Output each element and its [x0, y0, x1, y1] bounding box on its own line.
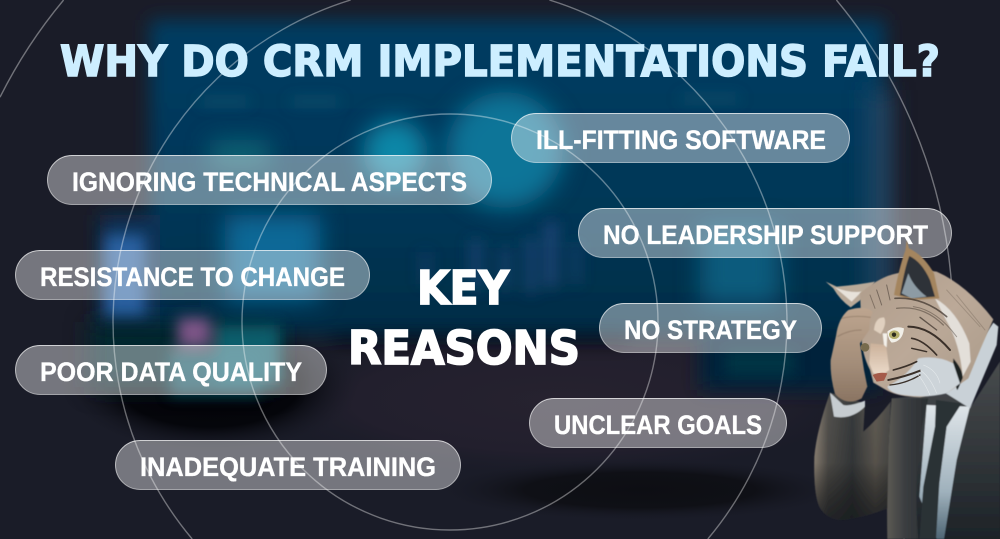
tie	[919, 400, 962, 539]
pill: ill-fitting software	[512, 114, 850, 162]
pill: ignoring technical aspects: IGNORING TECHNICAL ASPECTS	[72, 167, 467, 197]
pill: poor data quality: POOR DATA QUALITY	[40, 357, 302, 387]
fur stripes	[870, 285, 985, 385]
pill: no leadership support	[578, 208, 952, 258]
pill: no strategy: NO STRATEGY	[624, 315, 797, 345]
pill: no leadership support: NO LEADERSHIP SUPPORT	[603, 220, 928, 250]
raised sleeve	[814, 393, 891, 520]
ear right	[894, 240, 939, 300]
pill: unclear goals: UNCLEAR GOALS	[554, 410, 762, 440]
pill: inadequate training	[116, 440, 460, 490]
brow tufts	[874, 317, 885, 334]
pill: resistance to change: RESISTANCE TO CHANGE	[40, 262, 345, 292]
illustration: lynx in a suit, hand on forehead	[814, 240, 1000, 539]
pill: ignoring technical aspects	[48, 156, 492, 204]
pill: resistance to change	[16, 250, 370, 300]
nose	[873, 373, 887, 382]
whiskers	[917, 365, 940, 395]
pill: poor data quality	[16, 346, 326, 394]
ear left	[826, 282, 875, 307]
center heading: key reasons: KEY	[417, 261, 510, 315]
shirt	[919, 405, 970, 539]
head	[860, 270, 993, 397]
hand	[831, 308, 873, 402]
title: WHY DO CRM IMPLEMENTATIONS FAIL?	[60, 38, 940, 87]
white mane stripe	[935, 298, 971, 377]
pill: unclear goals	[530, 398, 786, 448]
center heading: key reasons: REASONS	[348, 321, 580, 375]
eye	[887, 327, 904, 343]
nose bridge	[869, 343, 889, 374]
dark mane mark	[952, 358, 963, 390]
pill: inadequate training: INADEQUATE TRAINING	[140, 452, 436, 482]
collar	[946, 323, 998, 408]
eye, far side	[861, 343, 869, 352]
white cheek fur	[887, 357, 960, 396]
cuff	[830, 393, 865, 417]
center heading: key reasons	[348, 261, 580, 375]
jacket body	[814, 323, 1000, 539]
lapel	[946, 362, 1000, 539]
pill: no strategy	[600, 304, 822, 352]
pill: ill-fitting software: ILL-FITTING SOFTWARE	[536, 125, 826, 155]
